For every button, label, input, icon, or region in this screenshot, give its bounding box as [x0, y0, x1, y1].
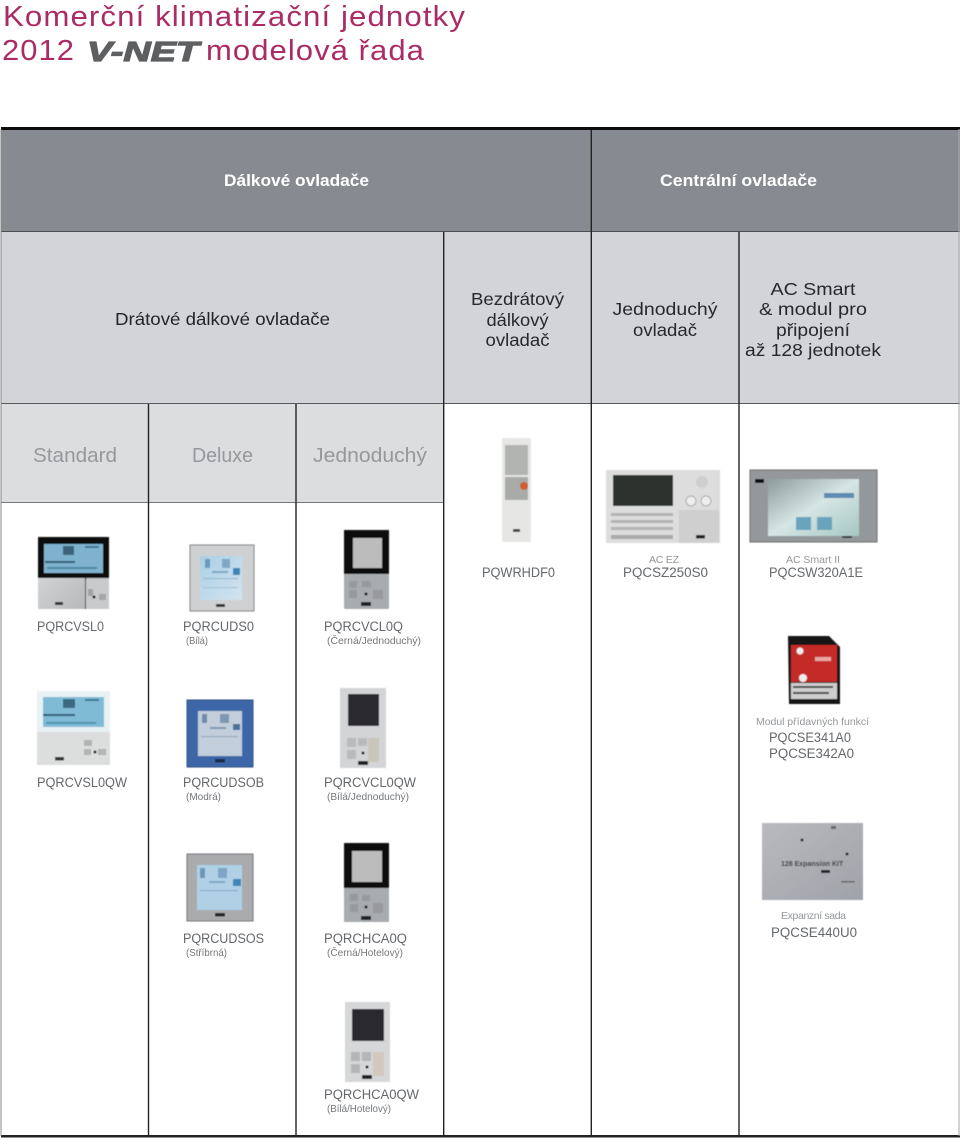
device: PQRCVSL0: [38, 537, 109, 609]
label: function module: PQCSE341A0: [769, 730, 851, 745]
device: PQRCUDS0: [190, 545, 254, 611]
label: AC EZ: PQCSZ250S0: [623, 565, 708, 580]
labels: wired controllers row 1: PQRCUDS0: [183, 619, 254, 634]
labels: wired controllers row 3: PQRCHCA0Q: [324, 931, 407, 946]
device: PQRCVSL0QW: [37, 691, 110, 765]
subheading: AC Smart and module: [745, 279, 881, 360]
labels: wired controllers row 1: (Černá/Jednoduchý): [327, 634, 421, 647]
label: AC EZ: AC EZ: [649, 554, 680, 566]
title: modelová řada: [206, 35, 425, 67]
subheading: Bezdrátový dálkový ovladač: Bezdrátový: [471, 289, 564, 309]
device: PQRCVCL0QW: [340, 688, 386, 768]
label: expansion kit: Expanzní sada: [781, 910, 846, 922]
device: expansion kit: 128 Expansion KIT: [781, 861, 844, 868]
labels: wired controllers row 2: [37, 775, 416, 803]
label: AC Smart II: [769, 554, 863, 580]
labels: wired controllers row 2: PQRCVCL0QW: [324, 775, 416, 790]
subheading: Jednoduchý ovladač: [612, 299, 718, 340]
labels: wired controllers row 4: PQRCHCA0QW: [324, 1087, 419, 1102]
labels: wired controllers row 4: [324, 1087, 419, 1115]
label: function module: PQCSE342A0: [769, 746, 854, 761]
labels: wired controllers row 2: (Modrá): [186, 791, 221, 803]
labels: wired controllers row 3: (Černá/Hotelový): [327, 946, 403, 959]
labels: wired controllers row 1: PQRCVCL0Q: [324, 619, 403, 634]
logo: V-NET: V-NET: [87, 36, 203, 67]
label: AC EZ: [623, 554, 708, 580]
label: AC Smart II: AC Smart II: [786, 554, 840, 566]
labels: wired controllers row 3: [183, 931, 407, 959]
title: [2, 1, 466, 67]
labels: wired controllers row 2: (Bílá/Jednoduchý): [327, 791, 409, 803]
device: SD card: [788, 636, 840, 704]
device: PQRCUDSOS: [187, 854, 253, 921]
device: PQWRHDF0 remote: [502, 438, 531, 542]
subheading: Jednoduchý ovladač: Jednoduchý: [612, 299, 718, 319]
category: Jednoduchý: Jednoduchý: [313, 444, 428, 467]
label: wireless remote: PQWRHDF0: [482, 565, 555, 580]
device: PQRCVCL0Q: [344, 530, 389, 609]
labels: wired controllers row 2: PQRCVSL0QW: [37, 775, 127, 790]
labels: wired controllers row 1: PQRCVSL0: [37, 619, 104, 634]
heading: Centrální ovladače: Centrální ovladače: [660, 172, 817, 190]
label: expansion kit: PQCSE440U0: [771, 925, 857, 940]
title: 2012: [2, 35, 75, 67]
labels: wired controllers row 1: (Bílá): [186, 635, 208, 647]
subheading: Jednoduchý ovladač: ovladač: [633, 320, 697, 340]
category: Deluxe: Deluxe: [192, 444, 253, 467]
category: Standard: Standard: [33, 444, 117, 467]
device: expansion kit: [762, 823, 863, 900]
heading: Dálkové ovladače: Dálkové ovladače: [224, 172, 369, 190]
labels: wired controllers row 4: (Bílá/Hotelový): [327, 1103, 391, 1115]
label: expansion kit: [771, 910, 857, 940]
subheading: Bezdrátový dálkový ovladač: ovladač: [486, 330, 550, 350]
device: PQRCUDSOB: [187, 700, 253, 767]
subheading: Bezdrátový dálkový ovladač: [471, 289, 564, 350]
labels: wired controllers row 3: (Stříbrná): [186, 947, 227, 959]
device: AC Smart II: [750, 470, 877, 542]
title: Komerční klimatizační jednotky: [3, 1, 466, 33]
device: PQRCHCA0QW: [345, 1002, 390, 1082]
subheading: AC Smart and module: AC Smart: [770, 279, 856, 299]
label: AC Smart II: PQCSW320A1E: [769, 565, 863, 580]
subheading: Bezdrátový dálkový ovladač: dálkový: [486, 310, 549, 330]
label: function module: [756, 716, 869, 761]
labels: wired controllers row 1: [37, 619, 421, 647]
subheading: Drátové dálkové ovladače: Drátové dálkové ovladače: [115, 309, 330, 329]
label: function module: Modul přídavných funkcí: [756, 716, 869, 728]
device: PQRCHCA0Q: [344, 843, 389, 922]
labels: wired controllers row 3: PQRCUDSOS: [183, 931, 264, 946]
subheading: AC Smart and module: až 128 jednotek: [745, 340, 881, 360]
device: AC EZ: [606, 470, 720, 543]
labels: wired controllers row 2: PQRCUDSOB: [183, 775, 264, 790]
subheading: AC Smart and module: & modul pro: [759, 299, 867, 319]
subheading: AC Smart and module: připojení: [776, 320, 850, 340]
